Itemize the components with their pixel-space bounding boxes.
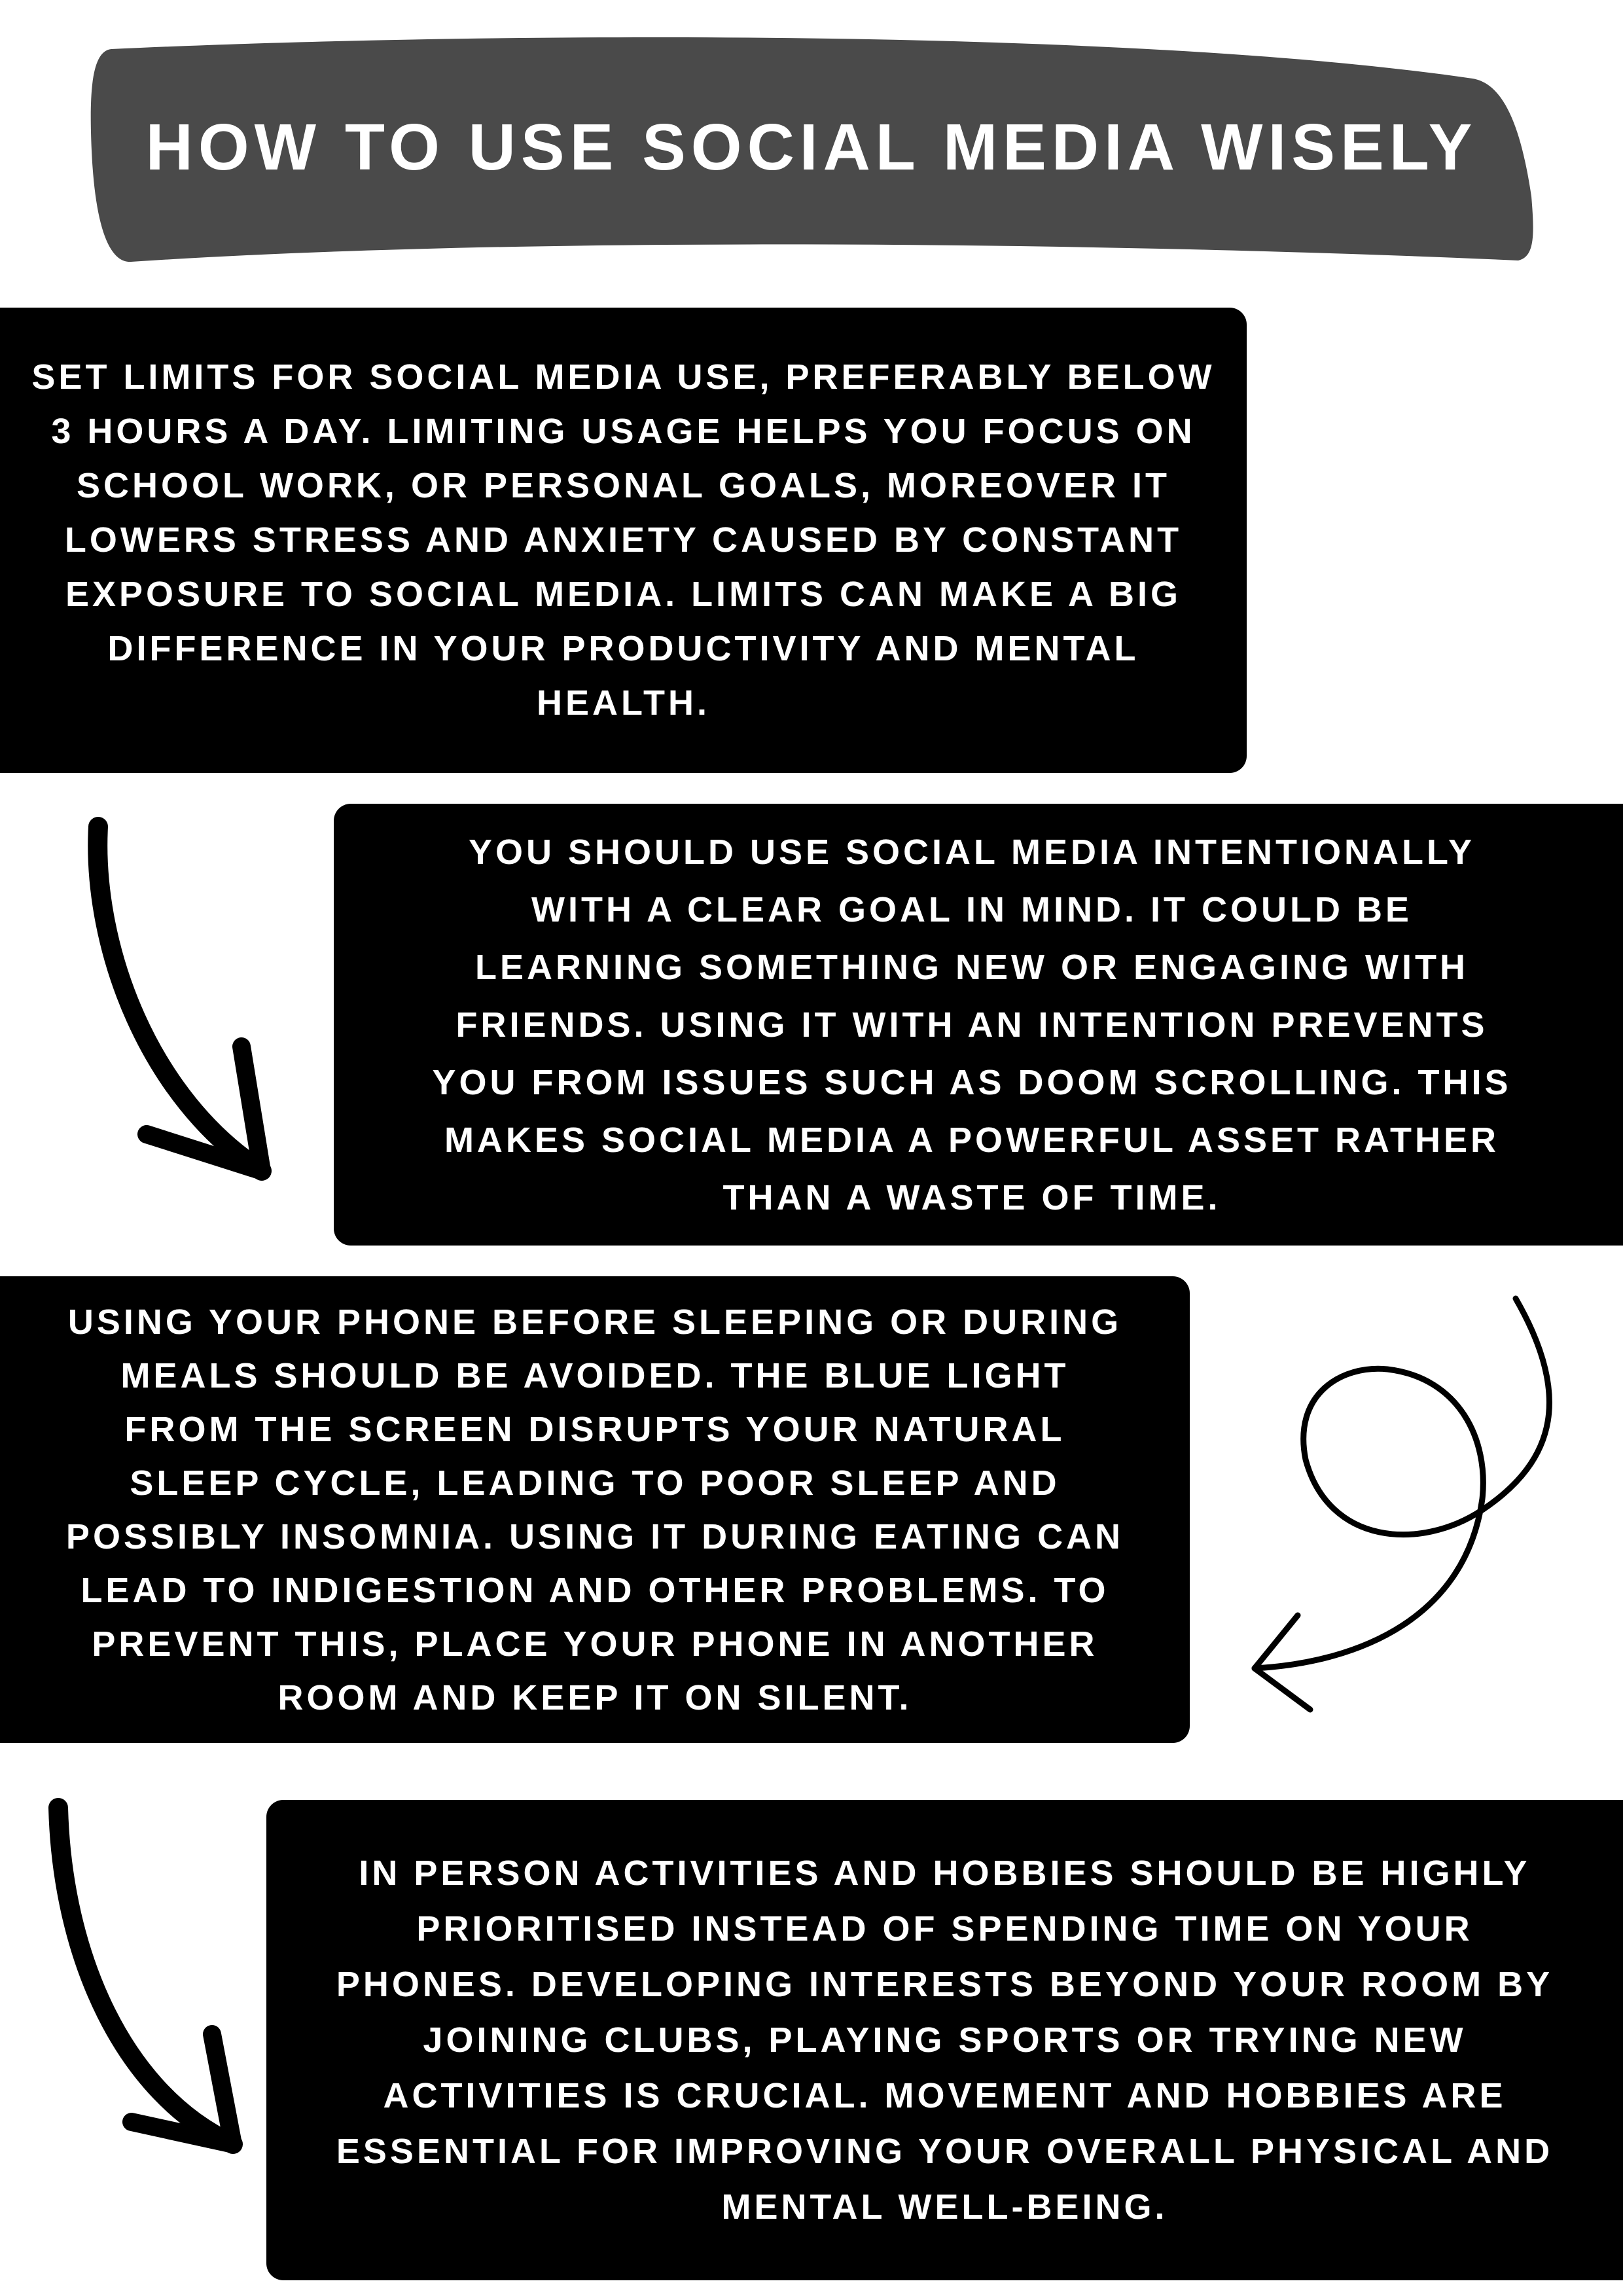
panel: avoid phone before sleep: ROOM AND KEEP IT ON SILENT. [277, 1678, 912, 1717]
panel: set limits: SET LIMITS FOR SOCIAL MEDIA USE, PREFERABLY BELOW [31, 357, 1215, 397]
panel: use intentionally: YOU SHOULD USE SOCIAL MEDIA INTENTIONALLY [469, 833, 1475, 872]
title text: HOW TO USE SOCIAL MEDIA WISELY [146, 111, 1477, 184]
panel: use intentionally: WITH A CLEAR GOAL IN MIND. IT COULD BE [531, 890, 1412, 929]
panel: avoid phone before sleep [0, 1276, 1190, 1743]
panel: set limits: DIFFERENCE IN YOUR PRODUCTIVITY AND MENTAL [107, 629, 1139, 668]
panel: set limits: SCHOOL WORK, OR PERSONAL GOALS, MOREOVER IT [77, 466, 1170, 505]
panel: use intentionally: LEARNING SOMETHING NEW OR ENGAGING WITH [475, 948, 1469, 987]
title banner [90, 37, 1533, 262]
panel: avoid phone before sleep: LEAD TO INDIGESTION AND OTHER PROBLEMS. TO [80, 1571, 1109, 1610]
panel: use intentionally: MAKES SOCIAL MEDIA A POWERFUL ASSET RATHER [444, 1121, 1499, 1160]
panel: set limits [0, 308, 1247, 773]
panel: set limits: 3 HOURS A DAY. LIMITING USAGE HELPS YOU FOCUS ON [51, 412, 1196, 451]
panel: set limits: EXPOSURE TO SOCIAL MEDIA. LIMITS CAN MAKE A BIG [65, 575, 1181, 614]
panel: in person activities: MENTAL WELL-BEING. [722, 2187, 1168, 2227]
panel: use intentionally: FRIENDS. USING IT WITH AN INTENTION PREVENTS [455, 1005, 1488, 1045]
panel: avoid phone before sleep: USING YOUR PHONE BEFORE SLEEPING OR DURING [68, 1302, 1122, 1342]
panel: in person activities: PRIORITISED INSTEAD OF SPENDING TIME ON YOUR [416, 1909, 1473, 1948]
panel: avoid phone before sleep: PREVENT THIS, PLACE YOUR PHONE IN ANOTHER [92, 1624, 1098, 1664]
panel: in person activities: ESSENTIAL FOR IMPROVING YOUR OVERALL PHYSICAL AND [336, 2131, 1553, 2170]
panel: use intentionally: YOU FROM ISSUES SUCH AS DOOM SCROLLING. THIS [432, 1063, 1512, 1102]
panel: in person activities: PHONES. DEVELOPING INTERESTS BEYOND YOUR ROOM BY [336, 1965, 1553, 2004]
panel: avoid phone before sleep: POSSIBLY INSOMNIA. USING IT DURING EATING CAN [66, 1517, 1124, 1556]
panel: set limits: LOWERS STRESS AND ANXIETY CAUSED BY CONSTANT [65, 520, 1182, 560]
panel: in person activities: IN PERSON ACTIVITIES AND HOBBIES SHOULD BE HIGHLY [359, 1854, 1531, 1893]
panel: in person activities [266, 1800, 1623, 2280]
panel: avoid phone before sleep: MEALS SHOULD BE AVOIDED. THE BLUE LIGHT [120, 1356, 1069, 1395]
panel: avoid phone before sleep: FROM THE SCREEN DISRUPTS YOUR NATURAL [124, 1410, 1065, 1449]
panel: set limits: HEALTH. [537, 683, 710, 723]
panel: in person activities: JOINING CLUBS, PLAYING SPORTS OR TRYING NEW [423, 2020, 1467, 2059]
panel: use intentionally [334, 804, 1623, 1246]
panel: use intentionally: THAN A WASTE OF TIME. [722, 1178, 1221, 1217]
panel: in person activities: ACTIVITIES IS CRUCIAL. MOVEMENT AND HOBBIES ARE [383, 2076, 1507, 2115]
panel: avoid phone before sleep: SLEEP CYCLE, LEADING TO POOR SLEEP AND [130, 1463, 1060, 1503]
